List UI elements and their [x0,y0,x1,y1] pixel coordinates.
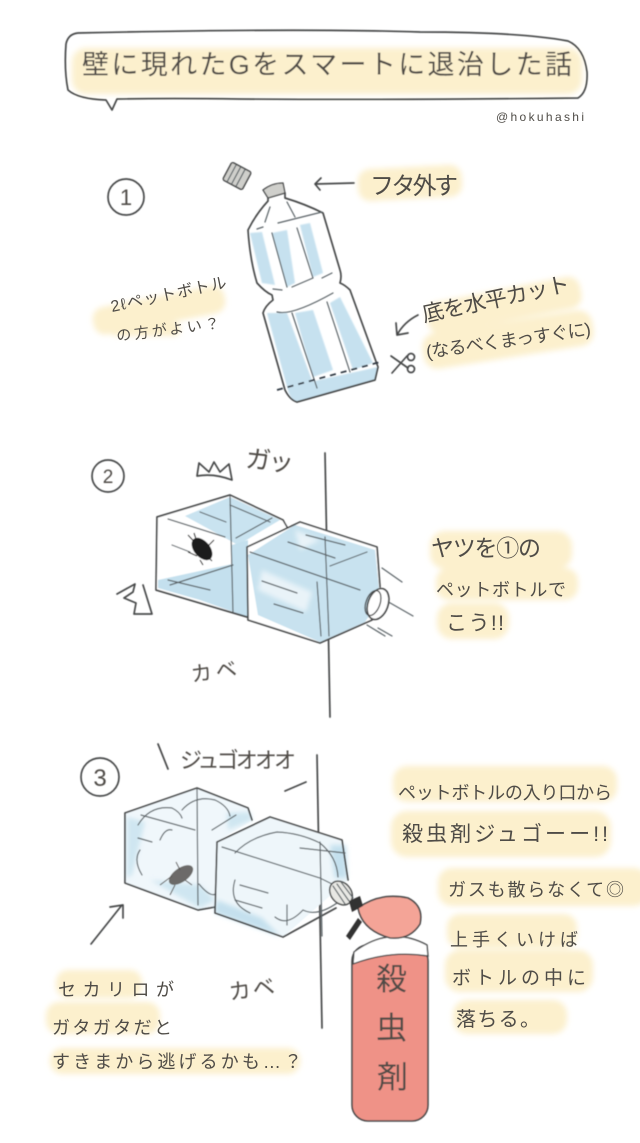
label: cut the bottom: (なるべくまっすぐに) [425,319,592,362]
icon: crash mark [197,462,232,480]
label: cut the bottom: 底を水平カット [420,271,572,327]
bottle threaded neck [325,877,357,909]
icon: side crash mark [117,584,152,614]
icon: scissors [391,354,414,373]
label: insecticide can text: 殺 [376,962,407,997]
panel: step 2 trap the roach [92,445,413,717]
label: trap note: ペットボトルで [436,580,566,600]
wall line [325,453,330,717]
arrow to gap [91,905,123,944]
label: falls inside [450,930,586,1031]
label: spray note: ペットボトルの入り口から [398,783,612,803]
label: trap note [431,535,566,635]
icon: spray can [346,896,428,1121]
step number 1 [108,179,144,215]
icon: bottle cap [223,162,251,190]
highlight: 2L bottle note [91,284,227,337]
step number 2: 2 [103,467,113,488]
icon: cockroach [188,533,216,565]
label: trap note: こう!! [446,612,504,635]
title speech bubble [65,30,587,110]
label: falls inside: 落ちる。 [456,1008,540,1031]
arrow to cut line [396,315,418,335]
label: 2L bottle note: の方がよい？ [115,315,221,345]
label: wall: カベ [227,974,276,1005]
highlight: trap note [430,531,578,639]
step number 3: 3 [93,765,107,792]
label: spray note [398,783,612,846]
bottle neck ring [362,586,393,622]
panel: step 1 cut the bottle [108,162,418,402]
arrow to cap label [315,178,354,190]
label: gatt sound: ガッ [244,445,295,478]
right bottle half with gas [215,817,357,937]
highlight: falls inside [445,914,593,1034]
label: 2L bottle note: 2ℓペットボトル [109,274,228,316]
label: trap note: ヤツを①の [431,535,541,561]
label: insecticide can text: 虫 [376,1011,407,1046]
credit: @hokuhashi [496,110,584,124]
icon: sprayed cockroach [160,861,196,895]
label: jugo sound: ジュゴオオオ [180,748,296,773]
label: gap warning [52,980,302,1072]
left bottle half [156,495,290,617]
label: falls inside: ボトルの中に [452,967,586,989]
label: gap warning: ガタガタだと [52,1018,172,1038]
icon: plastic bottle [248,183,380,402]
right bottle half [247,522,413,643]
panel: step 3 spray [81,744,428,1121]
label: gap warning: セカリロが [58,980,174,1000]
label: falls inside: 上手くいけば [450,930,578,950]
wall line [317,755,322,1028]
left bottle half with gas [125,788,252,910]
step number 2 [92,460,124,492]
label: insecticide can text: 剤 [377,1060,408,1095]
highlight: remove cap [357,164,463,202]
highlight: cut the bottom [420,275,596,371]
label: spray note: 殺虫剤ジュゴーー!! [402,823,608,846]
sound lines [158,744,306,791]
title text: 壁に現れたGをスマートに退治した話 [82,50,572,80]
highlight: spray note [391,766,617,857]
label: cut the bottom [420,271,592,362]
label: 2L bottle note [109,274,228,345]
label: insecticide can text [376,962,408,1095]
step number 1: 1 [120,185,132,210]
highlight: gap warning [46,970,300,1074]
step number 3 [81,758,119,796]
label: remove cap: フタ外す [370,173,458,200]
label: no gas scatter: ガスも散らなくて◎ [448,880,624,900]
label: wall: カベ [189,658,238,687]
label: gap warning: すきまから逃げるかも…？ [52,1052,302,1072]
highlight: no gas scatter [438,868,640,906]
